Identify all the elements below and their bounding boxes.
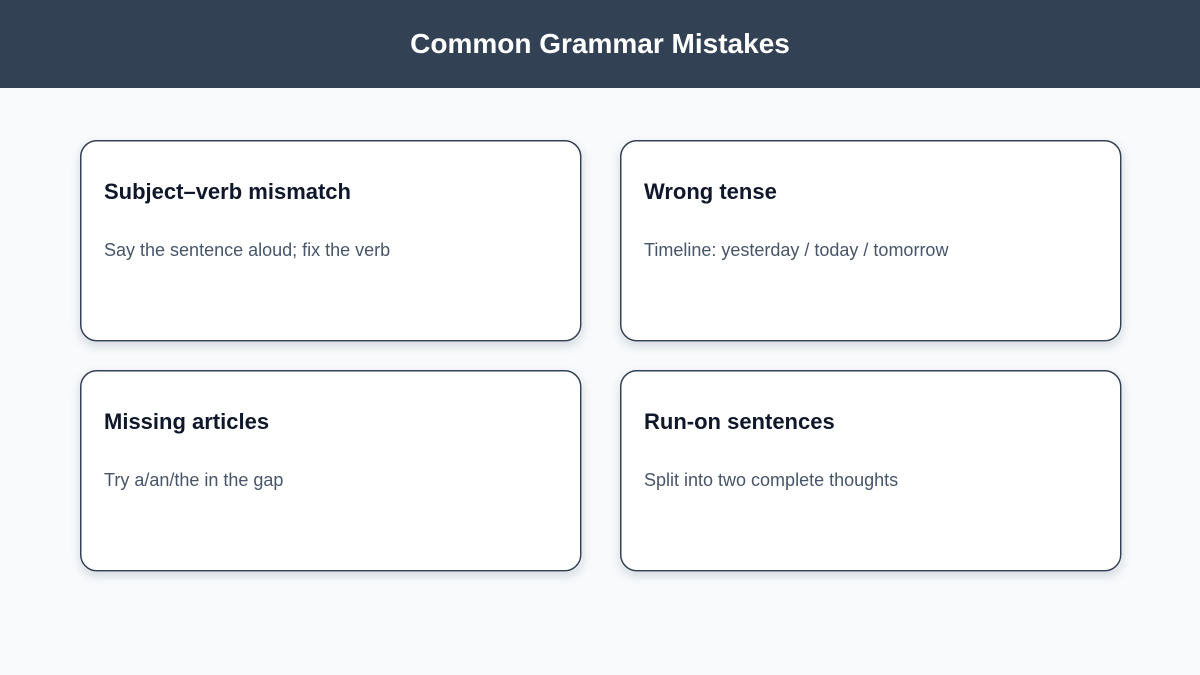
heading: missing articles: Missing articles [104,409,269,434]
panel: run-on sentences [620,370,1122,572]
tip: wrong tense: Timeline: yesterday / today / tomorrow [644,240,948,260]
panel: wrong tense [620,140,1122,342]
heading: wrong tense: Wrong tense [644,179,777,204]
panel: subject-verb mismatch [80,140,582,342]
tip: run-on sentences: Split into two complete thoughts [644,470,898,490]
heading: subject-verb mismatch: Subject–verb mismatch [104,179,351,204]
title: Common Grammar Mistakes [410,28,790,59]
tip: missing articles: Try a/an/the in the gap [104,470,283,490]
panel: missing articles [80,370,582,572]
tip: subject-verb mismatch: Say the sentence aloud; fix the verb [104,240,390,260]
header band [0,0,1200,88]
heading: run-on sentences: Run-on sentences [644,409,835,434]
